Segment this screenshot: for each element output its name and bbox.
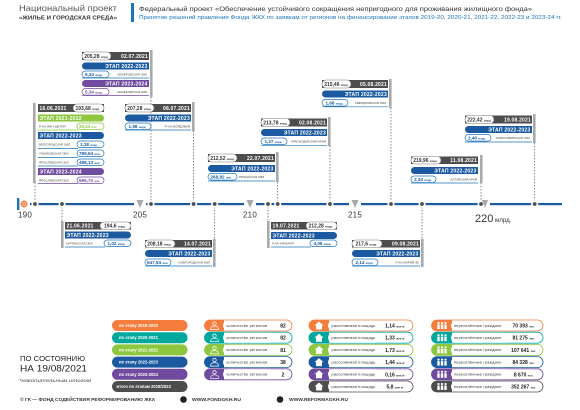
footer xyxy=(20,396,348,403)
heading: national project xyxy=(19,3,117,22)
table: resettled citizens: 70 393 чел. xyxy=(512,324,535,330)
heading: federal project: Принятие решений правления Фонда ЖКХ по заявкам от регионов на финансирование этапов 2019-20, 2020-21, 2021-22, 2022-23 и 2023-24 гг. xyxy=(139,14,563,21)
card: 19.08.2021: 19.08.2021 xyxy=(504,117,531,123)
card: 19.08.2021 xyxy=(465,114,536,143)
status note: ПО СОСТОЯНИЮ xyxy=(20,356,85,363)
table: resettled area: расселяемая площадь xyxy=(332,335,375,340)
card: 22.07.2021: 268,82 млн. xyxy=(210,174,232,179)
card: 16.06.2021: 498,13 млн. xyxy=(79,160,100,165)
card: 08.07.2021: ЭТАП 2022-2023 xyxy=(148,116,190,122)
legend: stages: по этапу 2020-2021 xyxy=(119,335,159,340)
card: 02.08.2021: КРАСНОДАРСКИЙ КРАЙ xyxy=(291,140,326,144)
table: resettled citizens: 107 641 чел. xyxy=(511,348,536,354)
card: 19.07.2021: Р-КА КАРЕЛИЯ xyxy=(272,242,294,246)
table: resettled area: расселяемая площадь xyxy=(332,384,375,389)
heading: federal project: Федеральный проект «Обеспечение устойчивого сокращения непригодного для проживания жилищного фонда» xyxy=(139,5,532,13)
table: regions count xyxy=(204,320,292,380)
card: 21.06.2021: 21.06.2021 xyxy=(66,224,94,230)
legend: stages: по этапу 2021-2022 xyxy=(119,347,159,352)
table: regions count: 82 xyxy=(280,336,286,342)
card: 05.08.2021: 05.08.2021 xyxy=(360,82,387,88)
status note: *накопительным итогом xyxy=(19,378,92,384)
table: regions count: 2 xyxy=(282,372,285,378)
table: resettled area xyxy=(309,320,413,392)
table: resettled citizens: переселённые граждане xyxy=(454,359,502,364)
card: 02.07.2021: 5,34 млрд. xyxy=(85,89,103,94)
card: 09.08.2021 xyxy=(352,239,424,267)
card: 02.07.2021: 5,34 млрд. xyxy=(85,72,103,77)
card: 14.07.2021: 208,18 млрд. xyxy=(147,242,172,248)
card: 19.07.2021: ЭТАП 2022-2023 xyxy=(272,233,315,239)
card: 19.07.2021: 4,09 млрд. xyxy=(314,241,331,246)
table: resettled citizens: переселённые граждане xyxy=(454,347,502,352)
card: 09.08.2021: 2,14 млрд. xyxy=(356,260,373,265)
card: 02.07.2021: ЭТАП 2023-2024 xyxy=(105,81,148,87)
card: 11.08.2021 xyxy=(411,155,483,183)
table: resettled citizens: переселённые граждане xyxy=(454,372,502,377)
table: regions count: количество регионов xyxy=(226,359,267,364)
card: 02.07.2021: ЭТАП 2022-2023 xyxy=(105,64,148,70)
card: 19.08.2021: 2,46 млрд. xyxy=(468,135,486,140)
card: 22.07.2021: 212,52 млрд. xyxy=(210,156,235,162)
legend: stages: итого по этапам 2019/2023 xyxy=(116,384,172,389)
card: 05.08.2021: ЭТАП 2022-2023 xyxy=(345,92,387,98)
table: resettled citizens: 81 275 чел. xyxy=(512,336,535,342)
card: 16.06.2021: 193,68 млрд. xyxy=(76,106,100,112)
table: resettled area: расселяемая площадь xyxy=(332,347,375,352)
table: resettled area: 5,8 млн м² xyxy=(387,384,404,390)
card: 09.08.2021: ЭТАП 2022-2023 xyxy=(376,251,418,257)
card: 21.06.2021: ЭТАП 2022-2023 xyxy=(66,233,109,239)
card: 08.07.2021: 08.07.2021 xyxy=(163,106,190,112)
card: 16.06.2021: 1,28 млрд. xyxy=(80,142,98,147)
card: 16.06.2021: УЛЬЯНОВСКАЯ ОБЛ. xyxy=(39,151,69,155)
card: 05.08.2021: 1,68 млрд. xyxy=(326,100,343,105)
card: 02.08.2021: ЭТАП 2022-2023 xyxy=(284,130,326,136)
card: 14.07.2021: НОВГОРОДСКАЯ ОБЛ. xyxy=(178,261,211,265)
card: 16.06.2021: ЭТАП 2022-2023 xyxy=(40,133,82,139)
table: resettled citizens: переселённые граждане xyxy=(454,384,502,389)
card: 02.07.2021: 205,28 млрд. xyxy=(84,54,109,60)
legend: stages: по этапу 2022-2023 xyxy=(119,360,159,365)
card: 02.07.2021: КЕМЕРОВСКАЯ ОБЛ. xyxy=(118,73,148,77)
heading: federal project xyxy=(139,5,563,21)
card: 11.08.2021: 11.08.2021 xyxy=(450,158,477,164)
timeline axis: 190 xyxy=(18,210,32,220)
card: 16.06.2021: БЕЛГОРОДСКАЯ ОБЛ. xyxy=(39,142,71,146)
card: 22.07.2021 xyxy=(208,152,279,182)
card: 08.07.2021: Р-ХА МОРДОВИЯ xyxy=(165,125,190,129)
card: 11.08.2021: ЭТАП 2022-2023 xyxy=(434,168,476,174)
table: resettled area: 0,16 млн м² xyxy=(385,372,405,378)
table: resettled area: 1,44 млн м² xyxy=(385,360,405,366)
heading: national project: Национальный проект xyxy=(19,3,117,13)
card: 16.06.2021: Р-ХА ИНГУШЕТИЯ xyxy=(39,124,66,128)
footer: WWW.FONDGKH.RU xyxy=(192,397,241,402)
card: 16.06.2021: 16.06.2021 xyxy=(40,106,67,112)
card: 02.07.2021 xyxy=(82,50,153,97)
card: 21.06.2021: 1,02 млрд. xyxy=(108,241,125,246)
table: resettled area: 1,73 млн м² xyxy=(385,348,405,354)
card: 02.08.2021: 02.08.2021 xyxy=(299,120,326,126)
card: 05.08.2021: 215,46 млрд. xyxy=(324,82,349,88)
table: regions count: количество регионов xyxy=(226,323,267,328)
card: 14.07.2021 xyxy=(145,239,216,267)
timeline axis: 210 xyxy=(243,210,257,220)
card: 09.08.2021: Р-ХА МАРИЙ ЭЛ xyxy=(395,261,419,265)
card: 02.08.2021 xyxy=(261,117,331,146)
card: 19.07.2021: 19.07.2021 xyxy=(272,224,300,230)
table: resettled area: 1,14 млн м² xyxy=(385,324,405,330)
card: 02.08.2021: 1,27 млрд. xyxy=(264,139,282,144)
card: 16.06.2021 xyxy=(33,103,104,184)
card: 19.08.2021: 222,42 млрд. xyxy=(467,117,492,123)
table: regions count: количество регионов xyxy=(226,347,267,352)
card: 09.08.2021: 217,6 млрд. xyxy=(356,242,377,248)
legend: stages xyxy=(112,320,188,392)
card: 02.08.2021: 213,78 млрд. xyxy=(263,120,288,126)
table: resettled area: расселяемая площадь xyxy=(332,372,375,377)
table: resettled area: 1,33 млн м² xyxy=(385,336,405,342)
table: resettled citizens: переселённые граждане xyxy=(454,323,502,328)
table: resettled area: расселяемая площадь xyxy=(332,359,375,364)
timeline axis: млрд. xyxy=(495,217,512,224)
card: 19.07.2021 xyxy=(267,221,337,248)
footer: WWW.REFORMAGKH.RU xyxy=(289,397,348,402)
card: 14.07.2021: 947,94 млн. xyxy=(147,260,168,265)
card: 21.06.2021: 194,6 млрд. xyxy=(104,224,126,230)
heading: national project: «ЖИЛЬЕ И ГОРОДСКАЯ СРЕДА» xyxy=(19,16,117,22)
card: 16.06.2021: ЯРОСЛАВСКАЯ ОБЛ. xyxy=(39,160,70,164)
timeline axis xyxy=(17,97,562,239)
card: 19.08.2021: НОВОСИБИРСКАЯ ОБЛ. xyxy=(496,136,531,140)
card: 22.07.2021: ЭТАП 2022-2023 xyxy=(231,166,274,172)
card: 16.06.2021: ЯРОСЛАВСКАЯ ОБЛ. xyxy=(39,178,70,182)
timeline axis: 215 xyxy=(348,210,362,220)
card: 11.08.2021: 219,96 млрд. xyxy=(413,158,438,164)
legend: stages: по этапу 2019-2020 xyxy=(119,323,159,328)
status note: НА 19/08/2021 xyxy=(20,364,87,374)
card: 22.07.2021: 22.07.2021 xyxy=(247,156,274,162)
card: 09.08.2021: 09.08.2021 xyxy=(392,242,419,248)
card: 16.06.2021: 789,64 млн. xyxy=(79,151,100,156)
card: 05.08.2021: СВЕРДЛОВСКАЯ ОБЛ. xyxy=(355,101,387,105)
card: 11.08.2021: 2,34 млрд. xyxy=(414,177,432,182)
card: 02.07.2021: КЕМЕРОВСКАЯ ОБЛ. xyxy=(118,90,148,94)
table: regions count: 81 xyxy=(280,348,286,354)
table: resettled citizens xyxy=(432,320,543,392)
card: 08.07.2021: 1,98 млрд. xyxy=(128,124,146,129)
card: 11.08.2021: АЛТАЙСКИЙ КРАЙ xyxy=(450,178,477,182)
timeline axis: 220 xyxy=(475,213,493,225)
card: 21.06.2021 xyxy=(61,221,131,248)
table: resettled citizens: 8 670 чел. xyxy=(514,372,533,378)
table: resettled citizens: переселённые граждане xyxy=(454,335,502,340)
card: 16.06.2021: ЭТАП 2023-2024 xyxy=(40,169,82,175)
card: 16.06.2021: 596,73 млн. xyxy=(79,178,100,183)
card: 05.08.2021 xyxy=(322,79,392,108)
card: 22.07.2021: РЯЗАНСКАЯ ОБЛ. xyxy=(239,175,265,179)
card: 16.06.2021: ЭТАП 2021-2022 xyxy=(40,116,82,122)
card: 08.07.2021 xyxy=(125,102,195,131)
table: resettled citizens: 352 267 чел. xyxy=(511,384,536,390)
table: regions count: количество регионов xyxy=(226,372,267,377)
timeline axis: 205 xyxy=(133,210,147,220)
table: regions count: 38 xyxy=(280,360,286,366)
table: regions count: количество регионов xyxy=(226,335,267,340)
table: regions count: 82 xyxy=(280,324,286,330)
status note xyxy=(19,356,92,384)
card: 08.07.2021: 207,28 млрд. xyxy=(127,106,152,112)
card: 21.06.2021: КУРГАНСКАЯ ОБЛ. xyxy=(66,242,93,246)
card: 02.07.2021: 02.07.2021 xyxy=(121,54,148,60)
heading accent bar xyxy=(131,3,134,22)
card: 19.07.2021: 212,28 млрд. xyxy=(308,224,333,230)
table: resettled area: расселяемая площадь xyxy=(332,323,375,328)
card: 14.07.2021: 14.07.2021 xyxy=(184,242,211,248)
card: 14.07.2021: ЭТАП 2022-2023 xyxy=(168,251,210,257)
card: 19.08.2021: ЭТАП 2022-2023 xyxy=(488,127,530,133)
footer: © ГК — ФОНД СОДЕЙСТВИЯ РЕФОРМИРОВАНИЮ ЖКХ xyxy=(20,397,155,402)
table: resettled citizens: 84 328 чел. xyxy=(512,360,535,366)
card: 16.06.2021: 35,44 млн. xyxy=(79,124,97,129)
legend: stages: по этапу 2023-2024 xyxy=(119,372,159,377)
